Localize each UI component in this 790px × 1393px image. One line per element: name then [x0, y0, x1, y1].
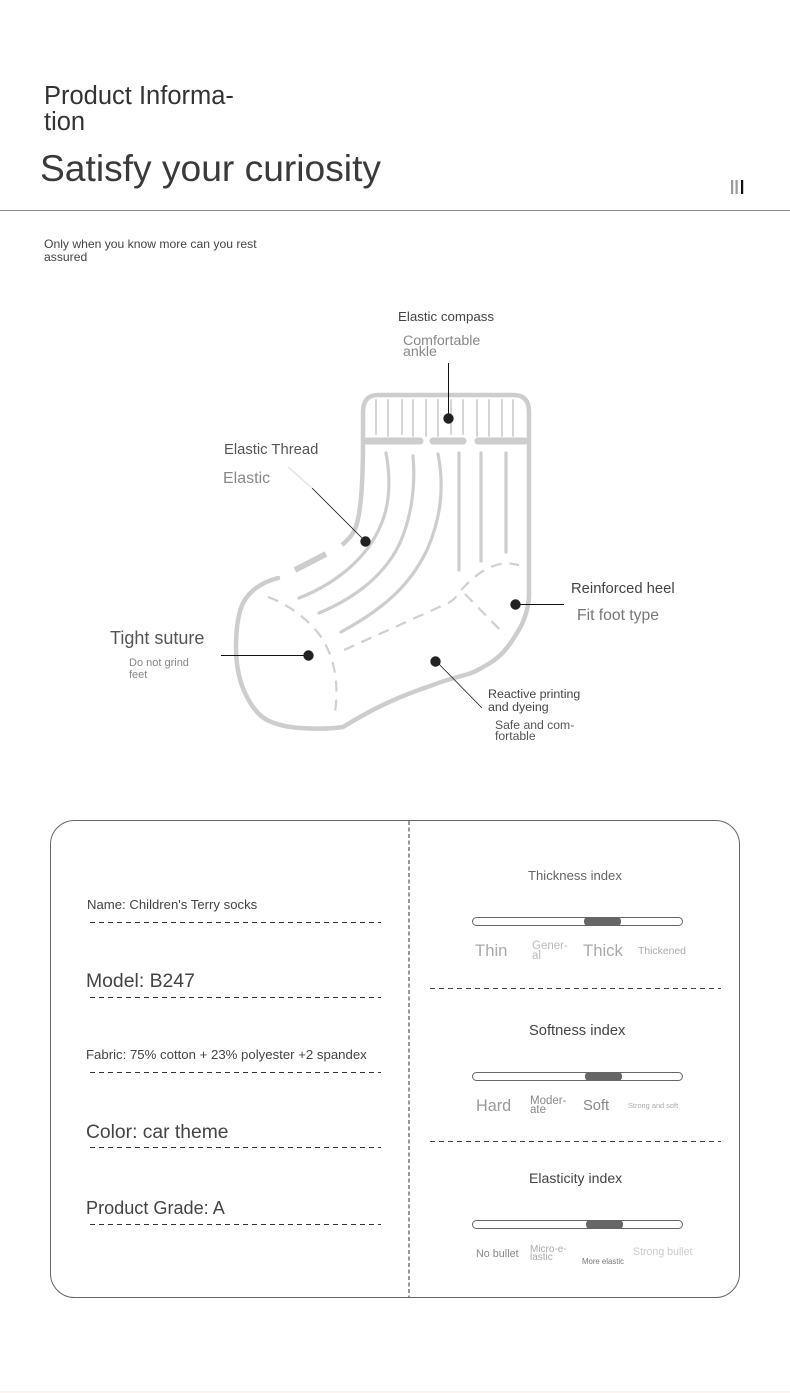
callout: elastic compass: Comfortable [403, 333, 480, 349]
softness index: Softness index [529, 1023, 626, 1039]
elasticity labels: No bullet [476, 1248, 519, 1260]
elasticity labels: Micro-e- [530, 1244, 567, 1255]
panel: product specifications card [50, 820, 740, 1298]
callout: tight suture: Tight suture [110, 628, 204, 648]
elasticity index: Elasticity index [529, 1170, 622, 1186]
elasticity labels: Strong bullet [633, 1246, 693, 1258]
icon: three vertical bars [731, 180, 743, 194]
attribute: grade: Product Grade: A [86, 1198, 226, 1218]
attribute: model: Model: B247 [86, 970, 195, 992]
elasticity labels: More elastic [582, 1257, 624, 1266]
thickness labels [475, 940, 686, 962]
thickness labels: al [532, 950, 541, 962]
elasticity labels [476, 1244, 693, 1266]
softness index [472, 1023, 682, 1116]
softness labels: Soft [583, 1098, 609, 1114]
callout: reinforced heel: Fit foot type [577, 607, 659, 624]
softness slider [472, 1072, 682, 1081]
callout: tight suture: feet [129, 669, 147, 681]
callout: reactive printing [488, 687, 580, 743]
callout: reactive printing: Reactive printing [488, 687, 580, 701]
thickness slider [472, 917, 682, 926]
elasticity index [472, 1170, 693, 1266]
callout: reactive printing: Safe and com- [495, 718, 574, 732]
softness labels: Hard [476, 1097, 511, 1115]
callout: elastic compass [398, 309, 494, 360]
thickness labels: Thickened [638, 946, 686, 957]
callout: reactive printing: fortable [495, 729, 536, 743]
heading: satisfy your curiosity: Satisfy your curiosity [40, 147, 381, 189]
attribute: fabric: Fabric: 75% cotton + 23% polyester +2 spandex [86, 1047, 367, 1062]
callout: tight suture: Do not grind [129, 657, 189, 669]
header [0, 82, 790, 264]
elasticity labels: lastic [530, 1252, 553, 1263]
callout: elastic thread: Elastic [223, 470, 270, 487]
callout: reinforced heel: Reinforced heel [571, 581, 675, 597]
subtitle: assured [44, 250, 87, 264]
subtitle: Only when you know more can you rest [44, 237, 257, 251]
callout: elastic thread [223, 442, 318, 487]
callout: reinforced heel [571, 581, 675, 624]
callout: reactive printing: and dyeing [488, 700, 549, 714]
thickness labels: Gener- [532, 940, 568, 952]
title: product information: tion [44, 108, 85, 136]
callout lines [221, 363, 564, 708]
thickness index [472, 868, 686, 962]
thickness labels: Thick [583, 941, 624, 960]
softness labels [476, 1095, 678, 1116]
thickness index: Thickness index [528, 868, 622, 883]
product attributes list [86, 897, 381, 1224]
elasticity slider [472, 1220, 682, 1229]
softness labels: Strong and soft [628, 1101, 678, 1110]
callout: elastic thread: Elastic Thread [224, 442, 318, 458]
thickness labels: Thin [475, 941, 507, 960]
softness labels: Moder- [530, 1095, 566, 1107]
softness labels: ate [530, 1104, 546, 1116]
callout: elastic compass: ankle [403, 344, 437, 360]
title: product information: Product Informa- [44, 82, 234, 110]
callout dots [303, 413, 521, 667]
callout: tight suture [110, 628, 204, 681]
attribute: color: Color: car theme [86, 1122, 229, 1143]
callout: elastic compass: Elastic compass [398, 309, 494, 324]
sock diagram [110, 309, 675, 743]
attribute: name: Name: Children's Terry socks [87, 897, 258, 912]
sock illustration [236, 395, 529, 729]
